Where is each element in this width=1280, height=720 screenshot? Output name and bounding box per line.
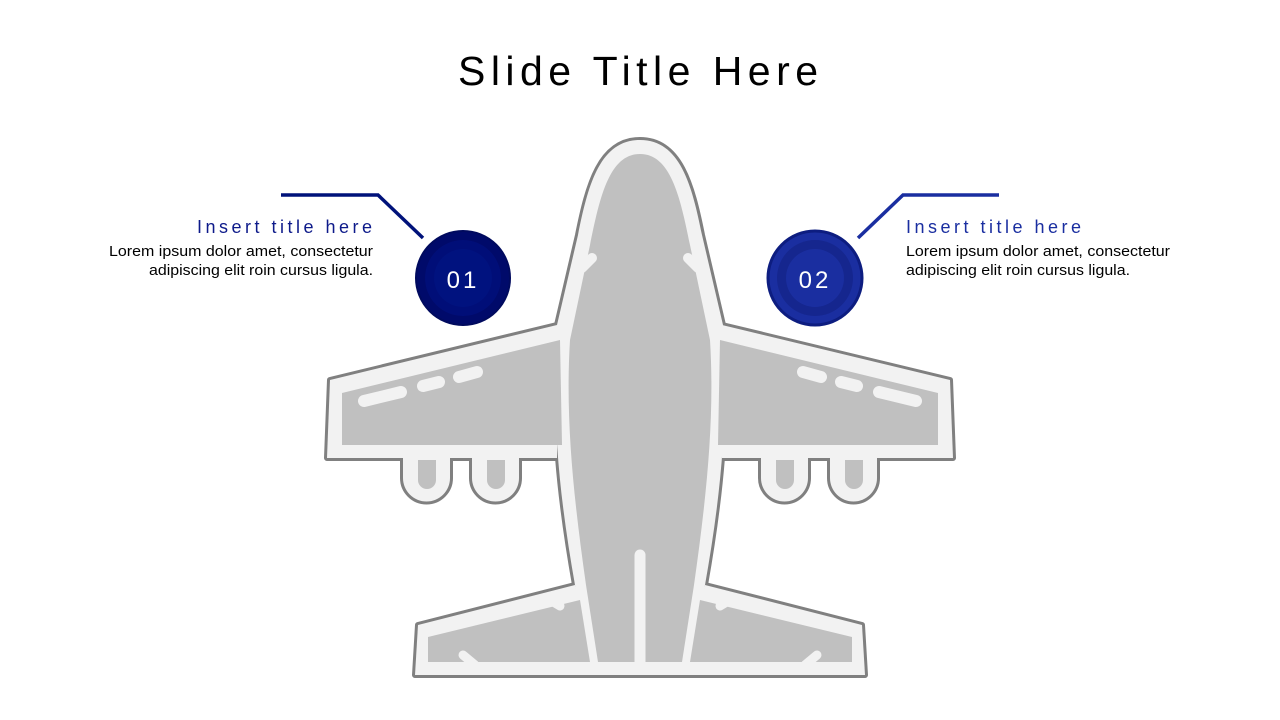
text block 01 bbox=[109, 217, 373, 279]
callout line 01 bbox=[281, 195, 423, 238]
text block 02: Insert title here bbox=[906, 217, 1081, 237]
badge 02: 02 bbox=[799, 267, 831, 294]
text block 01: Lorem ipsum dolor amet, consectetur bbox=[109, 244, 373, 260]
badge 01: 01 bbox=[447, 267, 479, 294]
text block 01: Insert title here bbox=[197, 217, 372, 237]
text block 01: adipiscing elit roin cursus ligula. bbox=[149, 263, 373, 279]
text block 02: Lorem ipsum dolor amet, consectetur bbox=[906, 244, 1170, 260]
title: Slide Title Here bbox=[458, 48, 818, 94]
text block 02: adipiscing elit roin cursus ligula. bbox=[906, 263, 1130, 279]
callout line 02 bbox=[858, 195, 999, 238]
airplane bbox=[327, 140, 953, 675]
badge 02 bbox=[768, 231, 862, 325]
badge 01 bbox=[416, 231, 510, 325]
text block 02 bbox=[906, 217, 1170, 279]
